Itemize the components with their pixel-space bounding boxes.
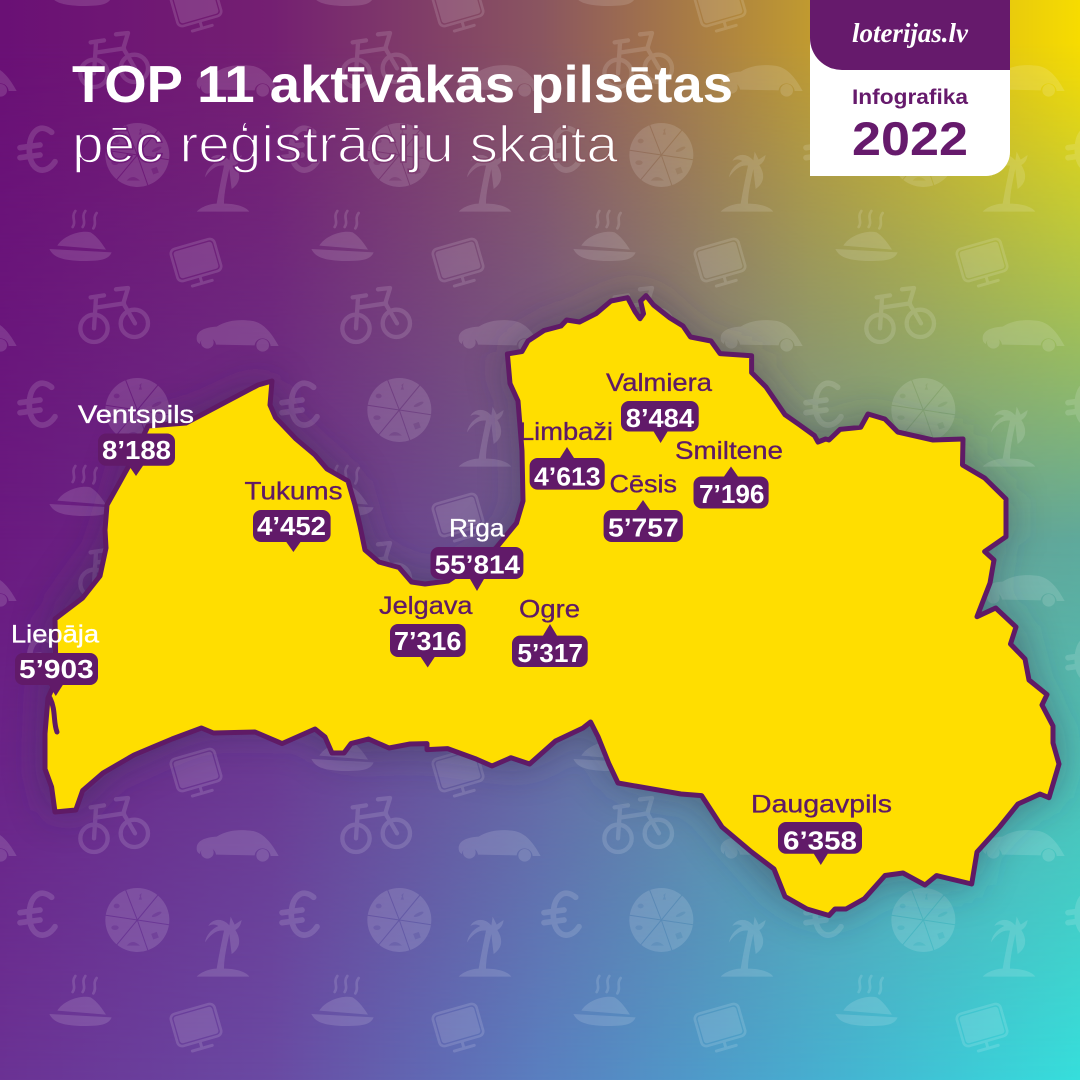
city: Limbaži [519,418,613,492]
city: Ogre: 5’317 [517,638,583,668]
city: Smiltene [675,437,783,509]
city: Rīga: 55’814 [435,550,521,580]
city: Smiltene: Smiltene [675,437,783,465]
city: Liepāja: Liepāja [11,620,99,648]
city: Daugavpils [751,790,892,865]
city: Limbaži: Limbaži [519,418,613,446]
city: Ogre [512,596,588,668]
city: Valmiera: Valmiera [606,369,712,397]
city: Liepāja [11,620,99,696]
city: Tukums: 4’452 [257,511,326,541]
logo badge: 2022 [852,112,968,165]
city: Ventspils [78,401,194,476]
city: Ventspils: Ventspils [78,401,194,429]
logo badge [810,0,1010,176]
city: Limbaži: 4’613 [534,462,601,492]
title: pēc reģistrāciju skaita [72,116,618,174]
city: Rīga [430,514,523,591]
city: Daugavpils: Daugavpils [751,790,892,818]
map of Latvia [45,296,1059,916]
city: Cēsis [604,470,683,543]
city: Jelgava: 7’316 [394,626,461,656]
city: Tukums [244,478,342,552]
title [72,56,733,174]
city: Valmiera [606,369,712,443]
map shadow [45,296,1059,915]
city: Liepāja: 5’903 [19,654,94,684]
title: TOP 11 aktīvākās pilsētas [72,56,733,114]
city: Ogre: Ogre [519,596,580,624]
city: Jelgava: Jelgava [379,592,473,620]
city: Tukums: Tukums [244,478,342,506]
city: Valmiera: 8’484 [626,403,695,433]
city: Ventspils: 8’188 [102,435,171,465]
city: Daugavpils: 6’358 [783,825,857,855]
logo badge: loterijas.lv [852,18,969,48]
city: Cēsis: Cēsis [610,470,677,498]
city: Jelgava [379,592,473,668]
logo badge: Infografika [852,86,968,109]
city: Cēsis: 5’757 [608,513,679,543]
city: Smiltene: 7’196 [699,479,764,509]
city: Rīga: Rīga [449,514,505,542]
